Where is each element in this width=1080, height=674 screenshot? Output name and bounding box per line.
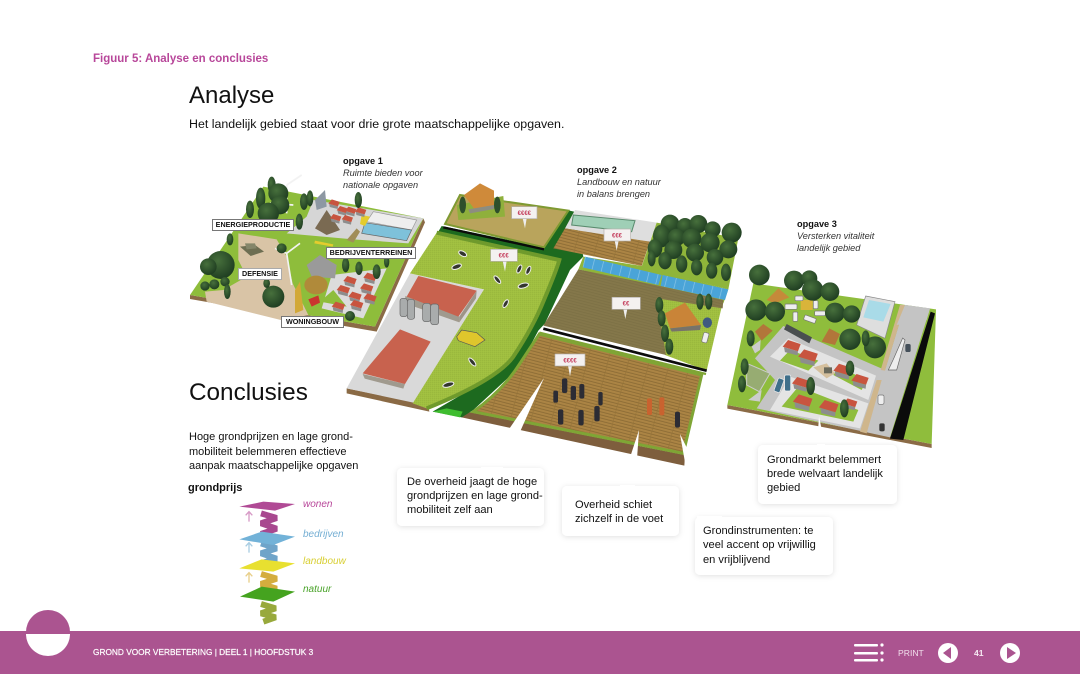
conclusion text: aanpak maatschappelijke opgaven: [189, 460, 358, 472]
callout: grondmarkt belemmert: gebied: [767, 482, 800, 494]
tag: bedrijventerreinen: BEDRIJVENTERREINEN: [330, 248, 412, 257]
heading: opgave 1: nationale opgaven: [343, 180, 418, 190]
price signs: €€€€: [518, 211, 532, 217]
heading: opgave 2: [577, 165, 662, 199]
callout: grondmarkt belemmert: brede welvaart landelijk: [767, 468, 883, 480]
icon: previous page: [938, 643, 958, 663]
forest: [648, 215, 742, 355]
panel: opgave 2 isometric plate: [347, 183, 742, 466]
heading: opgave 3: Versterken vitaliteit: [797, 231, 874, 241]
conclusion text: Hoge grondprijzen en lage grond-: [189, 431, 353, 443]
tag: woningbouw: [281, 316, 344, 328]
canal: [433, 210, 583, 417]
footer: page number: 41: [974, 648, 984, 658]
heading: opgave 2: opgave 2: [577, 165, 617, 175]
callout: overheid jaagt grondprijzen aan: De overheid jaagt de hoge: [407, 476, 537, 488]
icon: next page: [1000, 643, 1020, 663]
icon: menu: [854, 643, 884, 662]
tag: defensie: [238, 268, 282, 280]
heading: opgave 3: landelijk gebied: [797, 243, 860, 253]
top right field: [553, 228, 650, 266]
small gardens: [747, 340, 770, 402]
concrete yard: [347, 273, 484, 403]
forest grass: [642, 223, 738, 289]
solar panels: [583, 257, 728, 300]
callout: overheid schiet zichzelf in de voet: zichzelf in de voet: [575, 513, 663, 525]
conclusion text: mobiliteit belemmeren effectieve: [189, 446, 347, 458]
price signs: €€€: [499, 254, 509, 260]
building pool: [857, 296, 895, 338]
callout: overheid schiet zichzelf in de voet: Overheid schiet: [575, 499, 652, 511]
tag: defensie: DEFENSIE: [242, 269, 278, 278]
tag: energieproductie: [212, 219, 294, 231]
callout: overheid jaagt grondprijzen aan: [397, 467, 544, 526]
callout: grondinstrumenten: Grondinstrumenten: te: [703, 525, 813, 537]
tag: energieproductie: ENERGIEPRODUCTIE: [216, 220, 290, 229]
label: bedrijven: bedrijven: [303, 529, 344, 540]
cows: [442, 249, 532, 388]
callout: overheid schiet zichzelf in de voet: [562, 485, 679, 536]
brown field: [543, 269, 723, 355]
title: Analyse: Analyse: [189, 82, 274, 109]
label: wonen: wonen: [303, 499, 332, 510]
figure heading: Figuur 5: Analyse en conclusies: [93, 53, 268, 65]
black road: [890, 312, 935, 440]
price signs: €€€: [612, 233, 623, 239]
heading: opgave 3: opgave 3: [797, 219, 837, 229]
harvester: [457, 330, 485, 347]
houses: [783, 340, 869, 417]
striped field: [473, 334, 702, 453]
conclusion text: [189, 431, 358, 472]
title: Conclusies: Conclusies: [189, 379, 308, 406]
price signs: [491, 207, 640, 376]
panel: opgave 3 isometric plate: [727, 265, 936, 448]
callout: grondinstrumenten: [695, 516, 833, 575]
icon: tank: [240, 243, 264, 256]
farmhouse top: [457, 183, 505, 220]
silos: [400, 298, 439, 325]
heading: opgave 1: Ruimte bieden voor: [343, 168, 423, 178]
farmhouse right: [665, 303, 712, 343]
barns: [363, 276, 477, 389]
footer bar: [0, 631, 1080, 674]
label: grondprijs: grondprijs: [188, 482, 242, 494]
intro text: Het landelijk gebied staat voor drie grote maatschappelijke opgaven.: [189, 117, 564, 131]
icon: wind turbines: [269, 175, 302, 285]
top field: [445, 195, 568, 247]
pasture: [410, 233, 559, 408]
footer: print: PRINT: [898, 648, 924, 658]
price signs: €€: [623, 302, 630, 308]
callout: grondinstrumenten: en vrijblijvend: [703, 554, 770, 566]
callout: grondmarkt belemmert: [758, 444, 897, 504]
heading: opgave 1: opgave 1: [343, 156, 383, 166]
tag: bedrijventerreinen: [326, 247, 416, 259]
callout: overheid jaagt grondprijzen aan: grondprijzen en lage grond-: [407, 490, 543, 502]
heading: opgave 2: Landbouw en natuur: [577, 177, 661, 187]
caravans and tents: [755, 288, 840, 345]
label: natuur: natuur: [303, 584, 331, 595]
trees opgave 3: [738, 265, 886, 417]
logo: half circle: [26, 610, 70, 656]
plate soil edges: [347, 388, 685, 466]
greenhouse yard: [565, 210, 657, 242]
bus and vehicles: [774, 324, 911, 431]
callout: grondinstrumenten: veel accent op vrijwillig: [703, 539, 816, 551]
people: [553, 378, 680, 428]
label: landbouw: landbouw: [303, 556, 346, 567]
callout: overheid jaagt grondprijzen aan: mobiliteit zelf aan: [407, 504, 493, 516]
callout: grondmarkt belemmert: Grondmarkt belemmert: [767, 454, 881, 466]
tag: woningbouw: WONINGBOUW: [286, 317, 339, 326]
footer text: GROND VOOR VERBETERING | DEEL 1 | HOOFDSTUK 3: [93, 647, 313, 657]
panel: opgave 1 isometric plate: [190, 175, 425, 332]
heading: opgave 1: [343, 156, 423, 190]
heading: opgave 2: in balans brengen: [577, 189, 650, 199]
chart: grondprijs stack: [239, 502, 295, 622]
icon: trees opgave 1: [200, 177, 389, 321]
hedge and ditch: [539, 329, 707, 374]
callout pointers: [481, 378, 825, 519]
price signs: €€€€: [563, 358, 577, 364]
heading: opgave 3: [797, 219, 875, 253]
right grass: [655, 288, 723, 371]
